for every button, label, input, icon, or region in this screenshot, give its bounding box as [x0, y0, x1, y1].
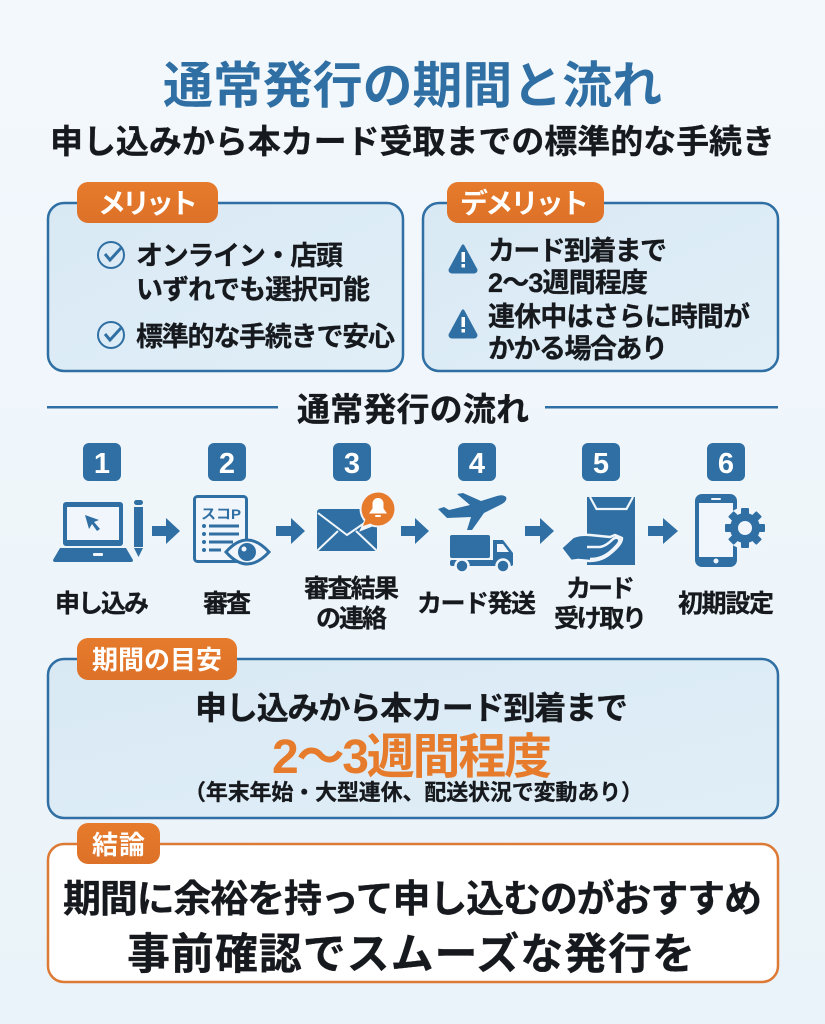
demerit tag: デメリット — [460, 187, 589, 219]
demerit tag — [447, 182, 604, 223]
step 1 — [53, 443, 149, 618]
panel: conclusion — [48, 823, 778, 982]
label 3: の連絡 — [316, 605, 387, 633]
badge 5: 5 — [593, 448, 609, 480]
badge 3: 3 — [344, 448, 360, 480]
demerit item 1: カード到着まで — [488, 236, 667, 266]
merit item 1: オンライン・店頭 — [136, 241, 343, 271]
label 2: 審査 — [203, 590, 251, 618]
label 5: 受け取り — [554, 605, 647, 633]
arrow 4 — [525, 518, 554, 544]
label 4: カード発送 — [417, 590, 536, 618]
conclusion tag — [77, 823, 160, 864]
badge 2 — [208, 443, 246, 481]
merit tag: メリット — [98, 188, 198, 219]
demerit item 2: かかる場合あり — [488, 334, 668, 364]
period lead text: 申し込みから本カード到着まで — [195, 690, 628, 726]
merit item 1 — [136, 241, 370, 305]
icon: envelope and hand — [561, 497, 635, 565]
badge 3 — [333, 443, 371, 481]
badge 4 — [458, 443, 496, 481]
badge 6: 6 — [718, 448, 734, 480]
icon: check 2 — [98, 322, 124, 348]
icon: document with eye: スコP — [201, 506, 241, 522]
merit tag — [77, 182, 218, 223]
label 1: 申し込み — [55, 590, 149, 618]
conclusion line 2: 事前確認でスムーズな発行を — [127, 931, 695, 979]
badge 6 — [707, 443, 745, 481]
icon: phone and gear — [695, 494, 766, 567]
period value: 2～3週間程度 — [272, 731, 552, 784]
title: 通常発行の期間と流れ — [163, 58, 662, 114]
merit item 2: 標準的な手続きで安心 — [136, 322, 395, 352]
conclusion line 1: 期間に余裕を持って申し込むのがおすすめ — [63, 879, 762, 921]
badge 1 — [83, 443, 121, 481]
period note: （年末年始・大型連休、配送状況で変動あり） — [184, 780, 643, 805]
badge 5 — [582, 443, 620, 481]
label 5: カード — [566, 575, 635, 603]
icon: check 1 — [98, 242, 124, 268]
period tag: 期間の目安 — [92, 645, 222, 675]
label 3: 審査結果 — [304, 575, 399, 603]
subtitle: 申し込みから本カード受取までの標準的な手続き — [50, 123, 775, 160]
badge 2: 2 — [219, 448, 235, 480]
period tag — [77, 638, 237, 680]
icon: warning 1 — [450, 246, 476, 272]
step 5 — [554, 443, 647, 633]
panel: demerit — [423, 182, 778, 371]
demerit item 2: 連休中はさらに時間が — [488, 301, 750, 332]
section heading: flow: 通常発行の流れ — [297, 391, 529, 428]
conclusion tag: 結論 — [92, 830, 145, 860]
demerit item 2 — [488, 301, 750, 364]
arrow 2 — [276, 518, 305, 544]
icon: warning 2 — [450, 311, 476, 337]
arrow 5 — [648, 518, 678, 544]
step 3 — [304, 443, 399, 633]
icon: plane and truck — [438, 493, 513, 572]
icon: laptop and pen — [53, 500, 143, 562]
icon: document with eye — [194, 496, 269, 564]
label 5 — [554, 575, 647, 633]
arrow 1 — [152, 518, 180, 544]
demerit item 1 — [488, 236, 667, 298]
arrow 3 — [401, 518, 429, 544]
demerit item 1: 2～3週間程度 — [488, 268, 648, 298]
step 2 — [194, 443, 269, 618]
step 4 — [417, 443, 536, 618]
label 3 — [304, 575, 399, 633]
badge 1: 1 — [94, 448, 110, 480]
panel: period estimate — [48, 638, 778, 818]
label 6: 初期設定 — [678, 590, 774, 618]
panel: merit — [48, 182, 403, 371]
step 6 — [678, 443, 774, 618]
badge 4: 4 — [469, 448, 485, 480]
icon: envelope with bell — [317, 490, 396, 551]
merit item 1: いずれでも選択可能 — [136, 275, 370, 305]
